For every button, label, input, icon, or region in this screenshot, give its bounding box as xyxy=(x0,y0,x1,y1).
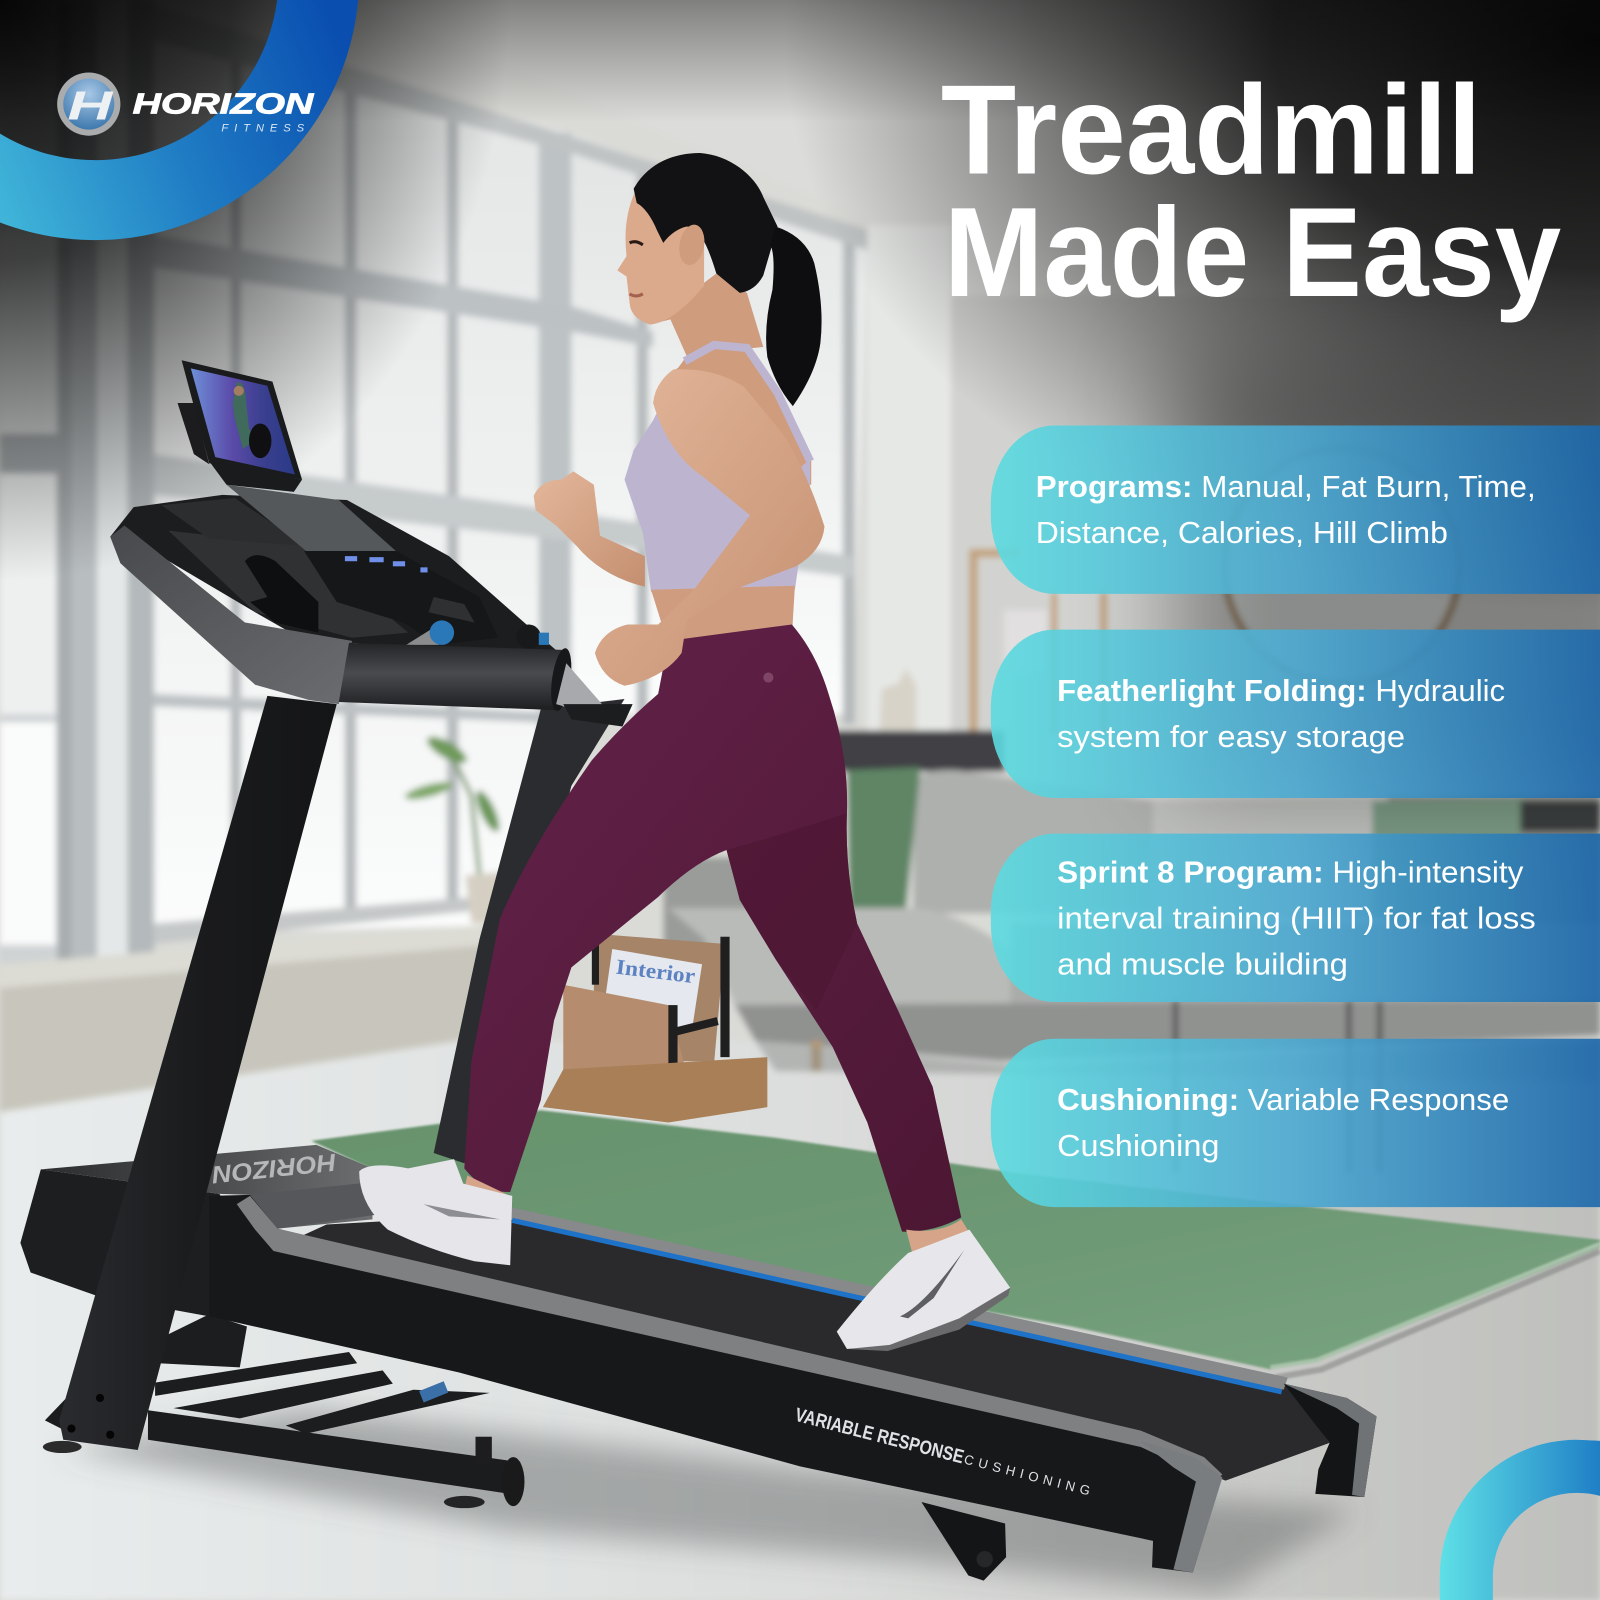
console dark shell xyxy=(110,495,571,663)
rack frame xyxy=(592,937,730,1071)
sports bra xyxy=(624,380,810,592)
title: Made Easy xyxy=(944,182,1561,324)
panel: cushioning: Cushioning xyxy=(1057,1129,1219,1163)
logo emblem xyxy=(57,72,120,136)
green rug xyxy=(311,1110,1600,1378)
deck side beam xyxy=(209,1195,1222,1572)
eye xyxy=(630,242,643,245)
neck xyxy=(650,273,763,371)
back wall xyxy=(0,0,1600,1122)
treadmill xyxy=(20,360,1377,1592)
upper arm and forearm xyxy=(595,369,824,686)
left forearm and hand xyxy=(534,471,645,587)
logo wordmark: HORIZON xyxy=(133,88,315,120)
decorative arc bottom right xyxy=(1440,1440,1600,1600)
left window column xyxy=(0,0,154,980)
panel: sprint 8 program: Sprint 8 Program: High-intensity xyxy=(1057,856,1524,890)
rear box xyxy=(20,1169,255,1316)
floor xyxy=(0,1041,1600,1600)
panel: featherlight folding xyxy=(991,630,1600,798)
blue stripe xyxy=(512,1220,1282,1392)
rear hood pad xyxy=(250,1183,380,1229)
panel: featherlight folding: Featherlight Folding: Hydraulic xyxy=(1057,674,1505,708)
panel: programs: Distance, Calories, Hill Climb xyxy=(1036,516,1448,550)
rack front xyxy=(563,985,686,1071)
handlebar xyxy=(339,643,633,727)
midriff xyxy=(651,586,795,645)
front shoe xyxy=(837,1219,1010,1351)
waistband logo xyxy=(763,672,773,683)
logo arc top left xyxy=(0,0,358,240)
rack base box xyxy=(543,1057,767,1122)
logo xyxy=(57,72,315,136)
speaker grille xyxy=(429,597,474,622)
upper back skin xyxy=(676,347,811,485)
ear xyxy=(676,223,707,267)
transport wheel xyxy=(444,1437,524,1508)
cup holder xyxy=(245,555,318,633)
logo subtitle: FITNESS xyxy=(221,123,305,135)
panel: cushioning: Cushioning: Variable Response xyxy=(1057,1083,1509,1117)
bra strap xyxy=(685,345,810,461)
side table xyxy=(832,731,1005,771)
panel: featherlight folding: system for easy storage xyxy=(1057,720,1405,754)
woman runner xyxy=(359,153,1010,1351)
panel: programs: Programs: Manual, Fat Burn, Time, xyxy=(1036,470,1536,504)
console grey side xyxy=(110,526,352,704)
shelf xyxy=(969,549,1107,735)
main window panes xyxy=(154,5,867,944)
rear right end cap xyxy=(1284,1384,1377,1497)
base bar xyxy=(148,1410,520,1494)
deck label: CUSHIONING xyxy=(963,1452,1092,1498)
ceiling soffit xyxy=(347,0,1020,306)
deck label xyxy=(793,1404,1092,1498)
dark vignette top right xyxy=(510,0,1600,633)
console body xyxy=(110,485,571,704)
deck label: VARIABLE RESPONSE xyxy=(793,1404,966,1468)
dark band right edge xyxy=(1173,357,1600,786)
logo emblem: H xyxy=(67,82,115,128)
dark band along top xyxy=(0,0,1600,122)
glass side table legs xyxy=(1173,1000,1382,1173)
plant xyxy=(403,732,508,923)
panel: programs xyxy=(991,426,1600,594)
console panel xyxy=(304,551,498,645)
front end cap xyxy=(1140,1441,1222,1572)
hood wordmark: HORIZON xyxy=(209,1148,338,1188)
console inner tray area xyxy=(168,531,408,638)
stabilizer foot xyxy=(43,1398,82,1453)
magazine: Interior xyxy=(615,955,697,988)
magazine xyxy=(602,949,702,1031)
lower frame links xyxy=(155,1314,490,1434)
tablet stand plate xyxy=(227,485,396,551)
sofa xyxy=(663,767,1600,1071)
leggings xyxy=(464,624,961,1232)
floor shadow xyxy=(61,1408,1357,1592)
console top tray xyxy=(161,498,306,546)
blue grip right xyxy=(516,624,549,649)
near side rail xyxy=(237,1196,1222,1482)
rear shoe xyxy=(359,1159,512,1265)
dark vignette top left xyxy=(0,0,520,592)
title xyxy=(941,59,1561,324)
shadow below sofa xyxy=(755,1041,1600,1082)
front fold wheel xyxy=(921,1502,1006,1581)
panel: sprint 8 program: interval training (HIIT) for fat loss xyxy=(1057,902,1536,936)
rear hood xyxy=(41,1145,372,1229)
control lights xyxy=(345,556,428,572)
walking belt xyxy=(278,1214,1330,1481)
legging shading xyxy=(727,813,857,1010)
magazine rack xyxy=(543,934,767,1122)
blue grip left xyxy=(406,620,454,645)
far side rail xyxy=(505,1207,1288,1390)
bolts xyxy=(67,1394,114,1439)
ponytail xyxy=(766,227,822,406)
panel: sprint 8 program xyxy=(991,834,1600,1002)
wall right side xyxy=(949,296,1600,806)
hydraulic cylinder xyxy=(419,1381,448,1402)
window sill and lower wall xyxy=(0,923,500,988)
tablet xyxy=(178,360,302,492)
mouth xyxy=(630,294,643,296)
panel: cushioning xyxy=(991,1039,1600,1207)
face xyxy=(617,193,704,324)
rack back xyxy=(594,934,724,1061)
rear upright post xyxy=(434,699,624,1163)
mirror xyxy=(1224,449,1459,684)
title: Treadmill xyxy=(941,59,1482,201)
vase on side table xyxy=(880,668,916,730)
panel: sprint 8 program: and muscle building xyxy=(1057,947,1348,981)
hair xyxy=(634,153,778,293)
main upright post xyxy=(59,696,337,1450)
